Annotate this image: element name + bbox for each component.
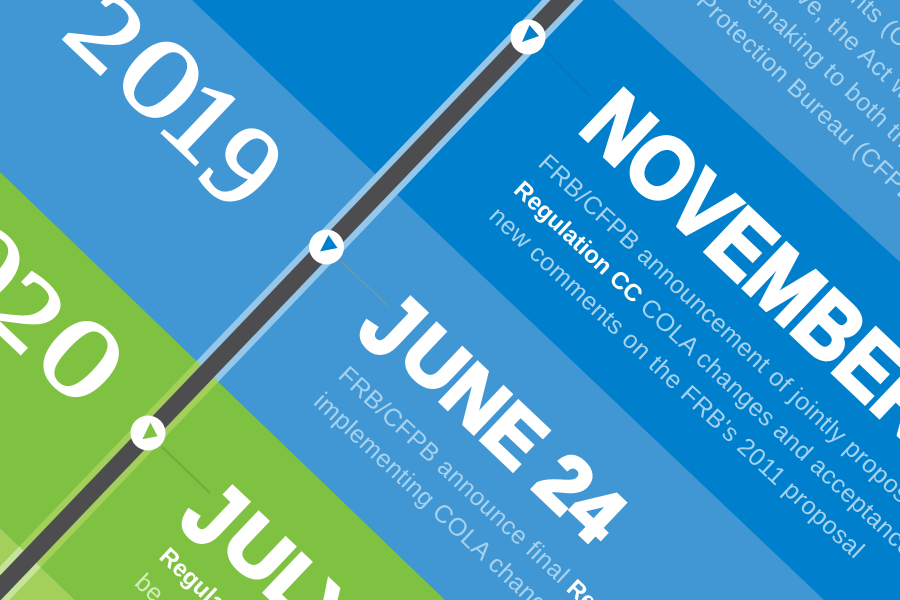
panel: November band bbox=[192, 0, 900, 600]
text block: November bbox=[484, 149, 900, 600]
year 2019 bbox=[36, 0, 312, 234]
timeline halo: green bbox=[19, 361, 218, 567]
panel: July band bbox=[0, 172, 445, 600]
year 2020: 0 bbox=[12, 289, 151, 429]
marker: November bbox=[510, 20, 546, 54]
heading: July bbox=[162, 461, 382, 600]
panel: upper right band bbox=[613, 0, 900, 262]
connector: June bbox=[342, 262, 388, 306]
connector: November bbox=[545, 50, 590, 96]
marker: June bbox=[309, 230, 344, 264]
heading: June 24: J bbox=[340, 272, 444, 379]
timeline halo: blue bbox=[196, 0, 584, 382]
year 2019: 0 bbox=[92, 9, 230, 150]
panel: next band bbox=[0, 528, 75, 600]
line 3: new comments on the FRB's 2011 proposal bbox=[484, 202, 870, 564]
text block: June bbox=[308, 361, 739, 600]
upper right text block bbox=[691, 0, 900, 277]
timeline bar bbox=[0, 0, 600, 600]
timeline halo: light green bbox=[0, 546, 41, 600]
year 2019: 1 bbox=[137, 53, 269, 188]
year 2019: 9 bbox=[176, 98, 309, 234]
heading: July: J bbox=[162, 461, 266, 568]
marker: July bbox=[130, 416, 166, 450]
heading: June 24: UNE 24 bbox=[384, 308, 642, 559]
year 2020 bbox=[0, 148, 151, 429]
text block: July bbox=[129, 543, 293, 600]
connector: July bbox=[162, 447, 210, 493]
